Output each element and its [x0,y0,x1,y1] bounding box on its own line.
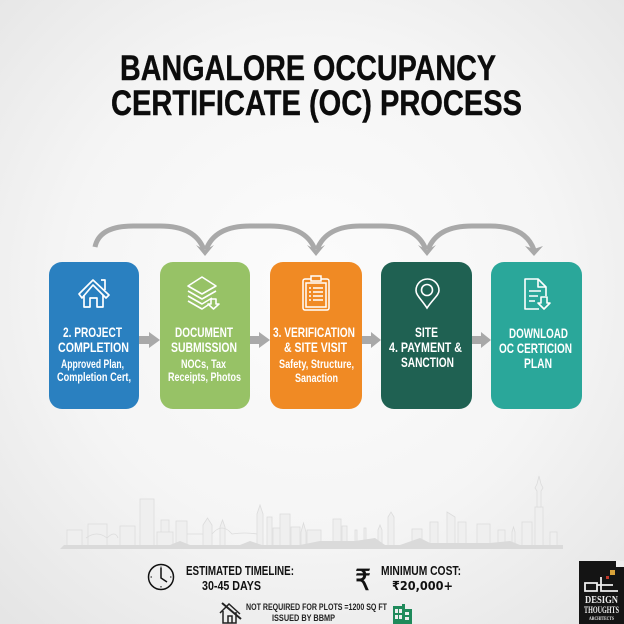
logo: design thoughts architects: DESIGN [585,595,619,606]
document submission text: DOCUMENT [175,324,233,340]
step 2 text [57,324,131,384]
minimum cost: MINIMUM COST: [381,563,461,578]
icon: no house [220,603,241,623]
icon: map pin [416,279,439,308]
download text: PLAN [524,355,552,371]
download text [499,325,572,371]
minimum cost [381,563,461,593]
title: BANGALORE OCCUPANCY [120,49,496,88]
step 3 text: Sanaction [295,373,338,385]
panel: download oc plan [491,262,582,409]
download text: DOWNLOAD [509,325,568,341]
straight arrows between cards [139,332,491,348]
download text: OC CERTICION [499,340,572,356]
step 4 text [389,324,462,370]
step 2 text: Completion Cert, [57,372,131,384]
logo: design thoughts architects: ARCHITECTS [589,617,614,622]
icon: document download [525,279,550,309]
step 3 text: Safety, Structure, [279,359,354,371]
step 4 text: 4. PAYMENT & [389,339,462,355]
panel: document submission [160,262,250,409]
document submission text: Receipts, Photos [168,372,241,384]
step 4 text: SITE [415,324,438,340]
panel: step 4 site payment and sanction [381,262,472,409]
step 3 text: & SITE VISIT [284,339,347,355]
logo: design thoughts architects [579,561,624,624]
icon: green building [393,604,412,624]
minimum cost: ₹20,000+ [392,578,453,593]
icon: house [79,280,109,307]
document submission text: NOCs, Tax [181,359,226,371]
document submission text [168,324,241,384]
step 2 text: Approved Plan, [61,359,124,371]
step 3 text: 3. VERIFICATION [273,324,355,340]
step 2 text: 2. PROJECT [63,324,122,340]
step 4 text: SANCTION [401,354,454,370]
step 2 text: COMPLETION [58,339,129,355]
estimated timeline: ESTIMATED TIMELINE: [186,563,294,578]
icon: rupee: ₹ [355,563,371,597]
panel: step 2 project completion [49,262,139,409]
title: CERTIFICATE (OC) PROCESS [111,84,522,123]
estimated timeline [186,563,294,593]
icon: document stack [188,277,219,309]
icon: clock [148,564,174,590]
document submission text: SUBMISSION [171,339,237,355]
panel: step 3 verification and site visit [270,262,362,409]
city skyline [60,476,563,549]
icon: clipboard [303,276,329,310]
title [111,49,522,123]
estimated timeline: 30-45 DAYS [202,578,261,593]
plot note: ISSUED BY BBMP [272,613,336,624]
plot note [246,602,387,624]
plot note: NOT REQUIRED FOR PLOTS =1200 SQ FT [246,602,387,613]
curved flow arrows [95,226,543,256]
step 3 text [273,324,355,385]
